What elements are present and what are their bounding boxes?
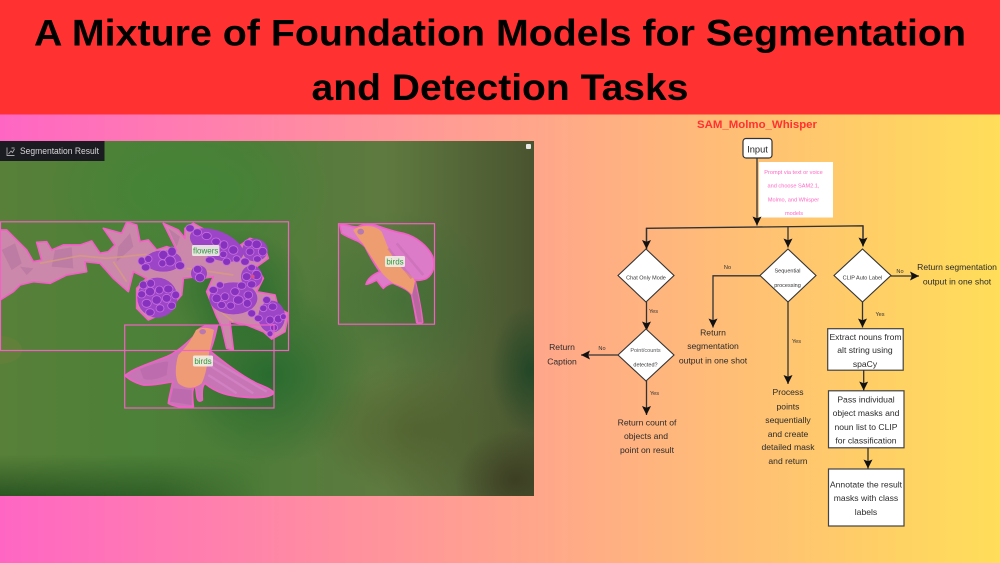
decision: sequential processing: processing: [774, 283, 801, 289]
prompt note: Molmo, and Whisper: [768, 198, 819, 204]
title: and Detection Tasks: [312, 66, 688, 108]
process: pass to clip: object masks and: [833, 408, 900, 418]
panel: flowchart: [547, 119, 997, 526]
bounding box: upper right bird: [338, 224, 434, 324]
result: return count: point on result: [620, 445, 675, 455]
arrow: sequential yes: [787, 302, 789, 384]
label: flowers: flowers: [193, 246, 218, 256]
result: clip one shot: output in one shot: [923, 276, 992, 286]
prompt note: [759, 162, 833, 218]
result: process points: and return: [768, 456, 808, 466]
segmentation mask: lower bird: [125, 326, 273, 407]
prompt note: Prompt via text or voice: [764, 170, 823, 176]
input to branch arrow: [756, 158, 758, 226]
process: extract nouns: Extract nouns from: [829, 332, 902, 342]
label: birds lower: birds: [194, 357, 212, 366]
label: yes: Yes: [650, 391, 659, 397]
prompt note: and choose SAM2.1,: [768, 184, 820, 190]
segmentation mask: upper right bird: [340, 224, 434, 324]
label: yes: Yes: [792, 339, 801, 345]
process: pass to clip: [828, 391, 904, 448]
label: no: No: [724, 265, 731, 271]
result: return count: objects and: [624, 431, 668, 441]
result: process points: and create: [768, 429, 809, 439]
flowchart title: SAM_Molmo_Whisper: [697, 119, 818, 131]
process: annotate masks: Annotate the result: [830, 480, 903, 490]
result: process points: points: [777, 402, 799, 412]
arrow: clip yes: [862, 302, 864, 328]
arrow: clip no: [891, 275, 919, 277]
image corner button: [526, 144, 531, 149]
label: no: No: [896, 269, 904, 275]
arrow: extract to pass: [863, 370, 865, 390]
label: birds upper: birds: [386, 258, 404, 266]
process: extract nouns: spaCy: [853, 359, 878, 369]
icon: chart: [7, 148, 14, 156]
result: one shot segmentation: output in one shot: [679, 356, 748, 366]
decision: point counts detected: Point/counts: [630, 348, 661, 354]
segmentation mask: flowering branch: [0, 221, 288, 350]
arrow: chat mode yes: [646, 302, 648, 330]
branch connector: [646, 226, 863, 249]
result: return count: Return count of: [618, 418, 677, 428]
tab label: Segmentation Result: [20, 146, 99, 156]
arrow: pass to annotate: [867, 448, 869, 468]
decision: chat only mode: [618, 249, 674, 302]
bounding box: lower bird: [125, 325, 274, 408]
panel: segmentation result image: [0, 141, 534, 496]
decision: sequential processing: [760, 249, 816, 302]
arrow: detection yes: [646, 381, 648, 415]
result: return caption: [547, 342, 577, 366]
result: one shot segmentation: [679, 328, 748, 366]
input node: Input: [747, 144, 768, 154]
arrow to sequential: [787, 227, 789, 248]
process: extract nouns: alt string using: [837, 345, 893, 355]
result: return caption: Return: [549, 342, 575, 352]
decision: point counts detected: [618, 329, 674, 381]
process: pass to clip: Pass individual: [837, 394, 895, 404]
arrow to chat only mode: [646, 228, 648, 249]
bounding box: flowers: [0, 222, 288, 350]
process: pass to clip: for classification: [835, 436, 897, 446]
result: one shot segmentation: segmentation: [687, 341, 739, 351]
process: extract nouns: [828, 329, 903, 370]
label: yes: Yes: [875, 312, 885, 318]
label: yes: Yes: [649, 309, 658, 315]
process: annotate masks: masks with class: [834, 493, 898, 503]
label: no: No: [598, 346, 606, 352]
input node: [743, 138, 772, 158]
process: annotate masks: labels: [855, 507, 877, 517]
result: process points: Process: [772, 387, 804, 397]
result: process points: [761, 387, 815, 466]
result: return count: [618, 418, 677, 455]
arrow: detection no: [581, 354, 618, 356]
result: one shot segmentation: Return: [700, 328, 726, 338]
decision: sequential processing: Sequential: [774, 268, 800, 274]
title banner: [0, 0, 1000, 114]
result: clip one shot: [917, 262, 997, 286]
arrow to clip auto label: [862, 226, 864, 246]
decision: point counts detected: detected?: [633, 362, 658, 368]
decision: chat only mode: Chat Only Mode: [626, 276, 666, 282]
decision: clip auto label: [834, 249, 891, 302]
result: clip one shot: Return segmentation: [917, 262, 997, 272]
title: A Mixture of Foundation Models for Segmentation: [34, 12, 966, 54]
result: process points: detailed mask: [761, 442, 815, 452]
result: return caption: Caption: [547, 356, 577, 366]
prompt note: models: [785, 211, 803, 217]
result: process points: sequentially: [765, 415, 811, 425]
decision: clip auto label: CLIP Auto Label: [843, 276, 882, 282]
arrow: sequential no: [713, 276, 760, 328]
image result tab: [0, 141, 104, 161]
process: annotate masks: [828, 469, 904, 526]
process: pass to clip: noun list to CLIP: [834, 422, 898, 432]
